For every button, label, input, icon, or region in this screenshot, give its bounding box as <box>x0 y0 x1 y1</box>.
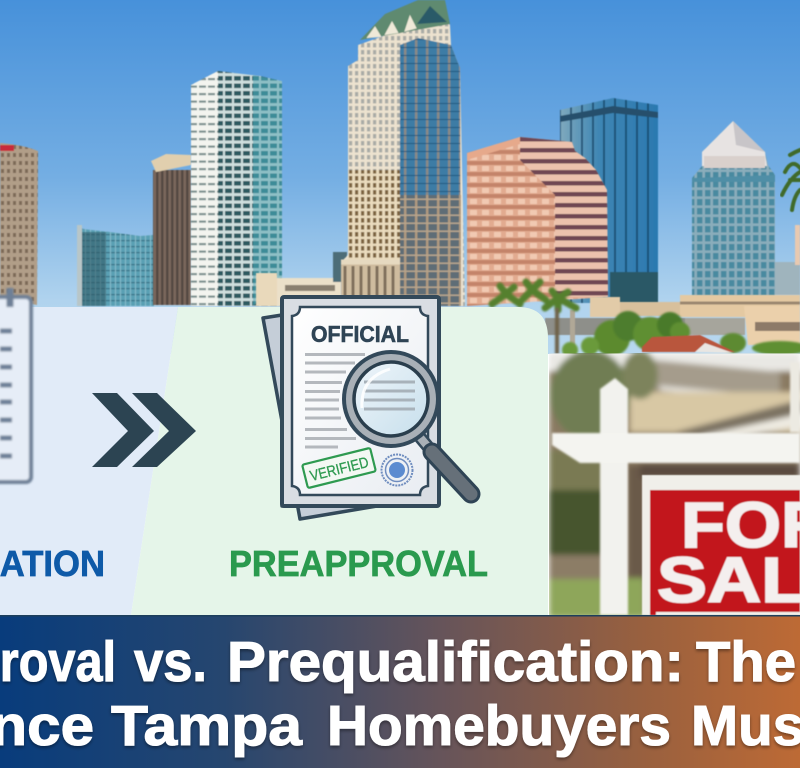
building: white and teal tower <box>191 71 282 306</box>
blurred photo background <box>549 350 800 618</box>
palm trees and green shrubs <box>492 282 800 358</box>
magnifying glass <box>344 352 471 494</box>
sign post <box>552 362 800 615</box>
front sheet <box>282 297 439 506</box>
sky <box>0 0 800 354</box>
building: right tower with pyramid roof <box>692 121 800 298</box>
house with red roof <box>642 335 735 353</box>
sign text: FOR SALE <box>657 500 800 604</box>
arrow: double chevron <box>92 393 196 467</box>
title text: The <box>696 630 796 694</box>
title text <box>0 630 800 758</box>
banner background <box>0 615 800 768</box>
building: main tall tower with green crown <box>341 0 465 306</box>
stamp: VERIFIED: VERIFIED <box>308 454 371 485</box>
panel: comparison background <box>0 307 548 615</box>
inner certificate frame <box>292 307 428 495</box>
heading: OFFICIAL: OFFICIAL <box>311 321 409 347</box>
panel: prequalification (blue) <box>0 307 178 615</box>
building: pink stepped tower <box>467 137 608 306</box>
title banner <box>0 615 800 768</box>
building: brown tower <box>151 154 191 305</box>
photo: for-sale sign in front of house <box>549 350 800 618</box>
text lines placeholder <box>305 354 365 447</box>
banner top line <box>0 615 800 616</box>
seal <box>382 454 412 486</box>
building: round tower <box>0 143 38 305</box>
building: teal low-rise <box>77 225 154 306</box>
sign board <box>642 475 800 616</box>
photo: Tampa skyline <box>0 0 800 358</box>
title text: Tampa <box>111 694 303 758</box>
icon: blurred clipboard <box>0 288 31 482</box>
label: PREAPPROVAL: PREAPPROVAL <box>229 543 488 584</box>
building: low cream blocks <box>256 252 347 306</box>
title text: vs. <box>134 630 207 694</box>
panel: preapproval (green) <box>131 307 548 615</box>
icon: official document with magnifier <box>263 297 471 519</box>
tree: palm at right edge <box>782 150 800 210</box>
back sheet <box>263 315 377 519</box>
building: glass tower <box>560 98 658 303</box>
title text: Homebuyers <box>327 694 671 758</box>
low-rise buildings and overpass <box>544 294 800 346</box>
title text: Prequalification: <box>227 630 684 694</box>
